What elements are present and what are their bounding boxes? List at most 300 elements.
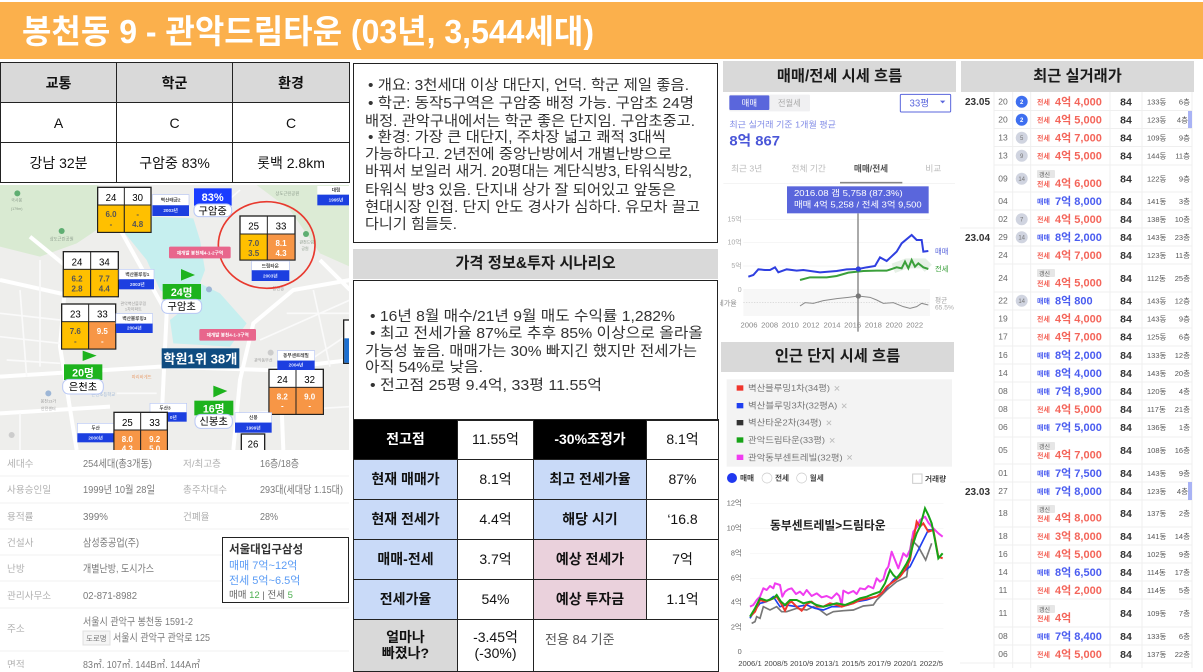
school: 구암중 83%: 83%: [202, 192, 224, 204]
month 23.05: 109동: [1147, 134, 1167, 142]
month 23.03: 전세: [1037, 550, 1050, 559]
month 23.04: 전세: [1037, 451, 1050, 460]
table: location ratings: 학군: [162, 74, 187, 90]
month 23.03: 6층: [1179, 632, 1190, 641]
table: price scenario: 7억: [672, 551, 693, 567]
map base: 상도근린공원: [275, 190, 299, 196]
month 23.03: 매매: [1037, 487, 1050, 496]
month 23.04: 매매: [1037, 423, 1050, 432]
month 23.04: 136동: [1147, 423, 1167, 432]
month 23.03: 84: [1120, 567, 1132, 579]
price box: 24/32: 32: [304, 375, 315, 386]
month 23.03: 141동: [1147, 532, 1167, 541]
complex tags: 벽산태금2: [161, 197, 181, 204]
legend: ✕: [841, 401, 848, 411]
table: price scenario: ‘16.8: [667, 511, 698, 527]
redevelopment labels: 재개발 봉천제4-1-2구역: [177, 249, 223, 256]
month 23.04: 21층: [1175, 405, 1190, 414]
heading: price info: 가격 정보&투자 시나리오: [455, 255, 616, 272]
average price: 8억 867: [729, 132, 780, 148]
edge marker: [344, 320, 351, 363]
table: location ratings: 롯백 2.8km: [257, 154, 325, 170]
line chart: 2022: [906, 321, 923, 330]
month 23.05: 144동: [1147, 152, 1167, 160]
complex tags: 2003년: [263, 272, 278, 278]
month 23.04: 117동: [1147, 405, 1166, 414]
callout: 서울대입구삼성: 전세 5억~6.5억: [229, 574, 300, 587]
month 23.05: 04: [998, 196, 1008, 206]
price box: 25/33 dream town: 8.1: [275, 239, 287, 248]
month 23.03: 전세: [1037, 532, 1050, 541]
month 23.03: 114동: [1147, 586, 1166, 595]
month 23.05: 84: [1120, 174, 1132, 186]
month 23.05: 4억 5,000: [1055, 114, 1102, 126]
map base: 1차아파트: [125, 306, 142, 312]
tab toggle: 전월세: [778, 98, 801, 108]
price box: 25/33 bottom: 25: [122, 418, 133, 429]
month 23.04: 매매: [1037, 369, 1050, 378]
school: 구암중 83%: 구암중: [198, 205, 227, 217]
month 23.04: 112동: [1147, 274, 1166, 283]
month 23.03: 4억 2,000: [1055, 584, 1102, 597]
month 23.05: 09: [998, 174, 1008, 184]
month 23.03: 전세: [1037, 650, 1050, 659]
month 23.04: 84: [1120, 273, 1132, 285]
line chart: 0: [738, 287, 742, 294]
month 23.05: 매매: [1037, 197, 1050, 206]
values: [83, 458, 343, 671]
table: location ratings: C: [286, 114, 296, 130]
heading: recent transactions: 최근 실거래가: [1033, 68, 1122, 85]
table: price scenario: (-30%): [474, 645, 516, 661]
heading: nearby complexes: [721, 342, 954, 372]
month 23.05: 13: [998, 132, 1008, 142]
month 23.04: 매매: [1037, 387, 1050, 396]
month 23.04: 143동: [1147, 314, 1167, 324]
price box: 23/33: 23: [70, 310, 81, 321]
month 23.03: 매매: [1037, 568, 1050, 577]
school: 은천초 20명: [63, 351, 103, 394]
month 23.03: 06: [998, 649, 1008, 659]
month 23.05: 133동: [1147, 98, 1167, 106]
table: price scenario: 4.4억: [479, 511, 512, 527]
month 23.04: 143동: [1147, 233, 1167, 242]
month 23.05: 23.05: [965, 97, 990, 108]
month 23.03: 22층: [1175, 650, 1190, 659]
labels: [7, 459, 227, 671]
line chart: 2010/9: [790, 659, 813, 668]
legend: ✕: [825, 418, 833, 428]
labels: 총주차대수: [183, 484, 227, 496]
table: location ratings: [0, 62, 350, 183]
month 23.05: 전세: [1037, 134, 1050, 142]
table: price scenario: 현재 전세가: [371, 511, 440, 527]
complex tags: 2003년: [130, 281, 145, 287]
table: recent transactions: [960, 92, 1192, 668]
school: 구암초 24명: 24명: [171, 287, 193, 299]
table: location ratings: 교통: [46, 74, 71, 90]
month 23.04: 14: [1018, 236, 1026, 242]
price box: 24/30: -: [110, 220, 113, 229]
values: 도로명: [86, 633, 107, 643]
map base: 은천초등학교: [91, 391, 115, 398]
month 23.04: 전세: [1037, 405, 1050, 414]
month 23.05: 3층: [1179, 197, 1190, 206]
month 23.04: 전세: [1037, 279, 1050, 288]
month 23.04: 05: [998, 445, 1008, 455]
price box: 25/33 dream town: 3.5: [248, 249, 260, 258]
legend: 관악동부센트레빌(32평): [748, 451, 843, 462]
month 23.04: 84: [1120, 232, 1132, 244]
line chart: [711, 213, 954, 332]
heading: recent transactions: [961, 61, 1194, 92]
line chart: 15억: [727, 215, 742, 223]
table: price scenario: 87%: [668, 471, 697, 487]
size dropdown: [900, 94, 951, 112]
chart panel: nearby complexes: [727, 380, 952, 668]
table: price scenario: 빠졌나?: [382, 645, 429, 661]
labels: 주소: [7, 624, 25, 635]
month 23.04: 매매: [1037, 296, 1050, 306]
school: 은천초 20명: 20명: [72, 368, 94, 380]
line chart: 8억: [731, 548, 742, 557]
tab toggle: 매매: [742, 98, 757, 108]
line chart: 10억: [727, 523, 742, 532]
title banner: 봉천동 9 - 관악드림타운 (03년, 3,544세대): [22, 13, 594, 50]
month 23.04: 24: [998, 250, 1008, 260]
line chart: 0: [738, 647, 742, 656]
line chart: 전세: [935, 264, 948, 273]
month 23.04: 6층: [1179, 332, 1190, 342]
chart tooltip: [787, 186, 929, 213]
table: price scenario: 3.7억: [479, 551, 512, 567]
month 23.04: 12층: [1175, 351, 1190, 360]
line chart: 2008/5: [764, 659, 788, 668]
price box: 24/34: 7.7: [99, 275, 110, 284]
text block: overview: 현대시장 인접. 단지 안도 경사가 심하다. 유모차 끌고: [365, 199, 700, 216]
filter options: 거래량: [925, 473, 946, 483]
month 23.04: 08: [998, 404, 1008, 414]
month 23.03: 매매: [1037, 632, 1050, 641]
title banner: [0, 2, 1203, 59]
line chart: 4억: [731, 598, 742, 607]
price box: 25/33 dream town: 25: [248, 222, 259, 233]
table: price scenario: 해당 시기: [562, 511, 618, 527]
month 23.03: 17층: [1175, 568, 1190, 577]
month 23.04: 125동: [1147, 332, 1167, 342]
price box: 24/30: 4.8: [132, 220, 144, 229]
month 23.05: 122동: [1147, 174, 1167, 184]
map base: 관악벽산블루밍: [120, 300, 146, 306]
map base: 상도근린공원: [50, 236, 74, 242]
month 23.03: 11: [999, 585, 1008, 595]
chart tabs: 최근 3년: [731, 163, 762, 173]
month 23.05: 9: [1020, 154, 1024, 160]
price box: 24/34: [63, 252, 118, 297]
month 23.05: 4억 5,000: [1055, 213, 1102, 226]
month 23.04: 06: [998, 422, 1008, 432]
month 23.05: 9층: [1179, 134, 1190, 142]
chart tabs: [723, 162, 955, 183]
month 23.03: [965, 485, 1190, 661]
month 23.03: 84: [1120, 608, 1132, 620]
month 23.04: 22: [998, 296, 1008, 306]
month 23.05: 14: [1018, 177, 1026, 183]
month 23.05: 02: [998, 214, 1008, 224]
month 23.03: 7층: [1179, 609, 1190, 618]
line chart: [727, 498, 943, 668]
month 23.04: 갱신: [1039, 270, 1050, 278]
school: 구암초 24명: [162, 269, 202, 313]
month 23.04: 4억 7,000: [1055, 330, 1102, 344]
line chart: 2016: [844, 321, 861, 330]
month 23.04: 123동: [1147, 251, 1167, 260]
month 23.04: 84: [1120, 332, 1132, 344]
month 23.04: 4억 4,000: [1055, 312, 1102, 326]
month 23.04: 120동: [1147, 387, 1167, 396]
month 23.03: 4억 8,000: [1055, 512, 1102, 524]
map base: (179m): [11, 207, 22, 211]
legend: ✕: [833, 384, 841, 394]
month 23.04: 14: [1018, 299, 1026, 305]
map highlight circle: [218, 202, 315, 288]
table: price scenario: 전세가율: [380, 591, 431, 607]
complex tags: 두산: [91, 425, 101, 432]
month 23.03: 84: [1120, 631, 1132, 643]
complex tags: 벽산블루밍3: [122, 315, 147, 322]
table: location ratings: 구암중 83%: [139, 154, 210, 170]
line chart: 6억: [731, 573, 742, 582]
line chart: 매매: [935, 247, 948, 256]
price box: 25/33 dream town: [240, 216, 295, 260]
values: 16층/18층: [260, 458, 299, 470]
month 23.04: 08: [998, 386, 1008, 396]
price box: 25/33 bottom: 8.0: [122, 435, 133, 444]
month 23.03: 8억 6,500: [1055, 566, 1102, 579]
month 23.03: 84: [1120, 531, 1132, 543]
price box: 24/34: 34: [99, 257, 110, 268]
month 23.03: 4억: [1055, 612, 1071, 624]
complex tags: 1999년: [246, 424, 261, 430]
complex tags: 2000년: [88, 435, 103, 441]
table: price scenario: [353, 419, 719, 672]
month 23.05: 20: [998, 96, 1008, 106]
month 23.03: 84: [1120, 549, 1132, 561]
tab toggle: [729, 95, 810, 111]
text block: scenario: • 16년 8월 매수/21년 9월 매도 수익률 1,282%: [370, 308, 675, 325]
table: price scenario: 전용 84 기준: [545, 632, 615, 646]
table: price scenario: 매매-전세: [377, 551, 434, 567]
text block: overview: 가능하다고. 2년전에 중앙난방에서 개별난방으로: [365, 146, 672, 163]
table: price scenario: 현재 매매가: [371, 471, 440, 487]
complex tags: 두산3: [159, 404, 171, 411]
complex tags: 2004년: [127, 325, 142, 331]
month 23.05: 20: [998, 114, 1008, 124]
line chart: 2022/5: [920, 659, 943, 668]
month 23.04: 9층: [1179, 469, 1190, 478]
complex tags: 동부센트레빌: [283, 352, 309, 359]
month 23.04: 19: [998, 314, 1008, 324]
month 23.04: [965, 231, 1190, 480]
complex tags: [77, 186, 351, 442]
month 23.05: 4층: [1177, 116, 1188, 124]
price box: 24/32: -: [308, 402, 311, 411]
month 23.03: 갱신: [1039, 606, 1050, 614]
month 23.03: 전세: [1037, 586, 1050, 595]
month 23.04: 84: [1120, 386, 1132, 398]
values: 399%: [83, 511, 108, 523]
legend: 벽산블루밍1차(34평): [748, 383, 830, 393]
text block: scenario: • 전고점 25평 9.4억, 33평 11.55억: [370, 377, 602, 394]
line chart: 2006/1: [738, 659, 762, 668]
month 23.03: 84: [1120, 649, 1132, 661]
month 23.03: 7억 8,400: [1055, 630, 1102, 643]
chart tabs: 전체 기간: [792, 163, 826, 173]
text block: overview: • 환경: 가장 큰 대단지, 주차장 넓고 쾌적 3대씩: [368, 129, 666, 146]
month 23.03: 84: [1120, 486, 1132, 498]
month 23.03: 23.03: [965, 487, 990, 498]
labels: 세대수: [7, 459, 34, 470]
month 23.04: 8억 2,000: [1055, 231, 1102, 244]
values: 02-871-8982: [83, 590, 137, 602]
month 23.05: 84: [1120, 214, 1132, 226]
complex tags: 드림타운: [262, 262, 280, 269]
month 23.04: 16: [998, 350, 1008, 360]
price box: 24/30: 30: [132, 193, 143, 204]
school: 신봉초 16명: [194, 386, 233, 428]
price box: 23/33: -: [74, 337, 77, 346]
values: 개별난방, 도시가스: [83, 563, 154, 575]
heading: price info: [353, 249, 718, 279]
month 23.05: 전세: [1037, 116, 1050, 124]
month 23.04: 전세: [1037, 314, 1050, 324]
month 23.04: 84: [1120, 468, 1132, 480]
month 23.04: 4억 7,000: [1055, 448, 1102, 462]
text block: overview: 다니기 힘들듯.: [365, 216, 457, 233]
month 23.03: 전세: [1037, 614, 1050, 623]
month 23.04: 23.04: [965, 233, 990, 244]
map base: 관악동부선: [254, 357, 273, 363]
month 23.04: 16층: [1175, 446, 1190, 455]
school: 구암중 83%: [194, 188, 232, 217]
month 23.04: 전세: [1037, 251, 1050, 260]
legend: 벽산타운2차(34평): [748, 418, 822, 428]
complex tags: 대림: [332, 186, 340, 193]
map base: [0, 185, 350, 453]
month 23.05: 5: [1020, 136, 1024, 142]
month 23.04: 143동: [1147, 296, 1167, 306]
month 23.05: 2: [1020, 118, 1024, 124]
month 23.04: 4억 7,000: [1055, 249, 1102, 262]
map base: 봉천동: [272, 285, 284, 291]
table: price scenario: 예상 투자금: [556, 591, 624, 607]
price box: 24/32: 9.0: [304, 392, 316, 401]
month 23.05: 138동: [1147, 215, 1167, 224]
table: price scenario: 8.1억: [666, 431, 699, 447]
month 23.04: 매매: [1037, 351, 1050, 360]
chart tabs: 비교: [925, 163, 941, 173]
month 23.03: 109동: [1147, 609, 1167, 618]
legend: ✕: [829, 435, 836, 445]
complex details panel: [0, 450, 349, 668]
heading: price trend: [723, 61, 956, 92]
line chart: 2018: [865, 321, 882, 330]
table: price scenario: 11.55억: [472, 431, 519, 447]
month 23.05: 6층: [1179, 98, 1190, 106]
text block: overview: 바꿔서 보일러 새거. 20평대는 계단식방3, 타워식방2,: [365, 163, 692, 180]
table: location ratings: A: [54, 114, 63, 130]
price box: 25/33 bottom: 33: [149, 418, 160, 429]
month 23.04: 01: [998, 468, 1008, 478]
values: 서울시 관악구 관악로 125: [113, 632, 210, 644]
table: price scenario: 예상 전세가: [556, 551, 624, 567]
text block: overview: [353, 63, 718, 243]
callout: 서울대입구삼성: 매매 7억~12억: [229, 559, 297, 572]
price box: 25/33 dream town: 7.0: [248, 239, 260, 248]
month 23.04: 전세: [1037, 332, 1050, 342]
price box: 24/30: 6.0: [105, 210, 117, 219]
line chart: 10억: [727, 239, 742, 247]
month 23.04: 매매: [1037, 233, 1050, 242]
month 23.05: 7억 8,000: [1055, 195, 1102, 208]
text block: scenario: 아직 54%로 낮음.: [365, 359, 483, 376]
month 23.05: 84: [1120, 114, 1132, 126]
table: location ratings: 강남 32분: [29, 154, 88, 170]
line chart: 2012: [802, 321, 820, 330]
month 23.04: 143동: [1147, 469, 1167, 478]
month 23.04: 84: [1120, 445, 1132, 457]
month 23.04: 12층: [1175, 296, 1190, 306]
month 23.04: 84: [1120, 314, 1132, 326]
month 23.05: 141동: [1147, 197, 1167, 206]
heading: nearby complexes: 인근 단지 시세 흐름: [775, 348, 900, 365]
price box: 24/32: 24: [277, 375, 288, 386]
complex tags: 2004년: [289, 362, 303, 368]
text block: overview: 배정. 관악구내에서는 학군 좋은 단지임. 구암초중고.: [365, 113, 695, 130]
chart tooltip: 2016.08 갭 5,758 (87.3%): [794, 188, 903, 198]
month 23.04: 24: [998, 273, 1008, 283]
month 23.04: 14: [998, 368, 1008, 378]
text block: scenario: [353, 280, 718, 421]
month 23.03: 14: [998, 567, 1008, 577]
month 23.04: 8억 800: [1055, 294, 1093, 308]
price box: 24/34: 6.2: [71, 275, 83, 284]
line chart: 65.5%: [935, 304, 954, 311]
month 23.04: 17: [998, 332, 1008, 342]
chart tooltip: 매매 4억 5,258 / 전세 3억 9,500: [794, 200, 922, 210]
month 23.05: 갱신: [1039, 171, 1050, 179]
table: price scenario: 54%: [481, 591, 510, 607]
month 23.04: 7억 8,900: [1055, 385, 1102, 398]
line chart: 2010: [782, 321, 799, 330]
month 23.03: 4억 5,000: [1055, 548, 1102, 561]
price box: 24/34: 4.4: [99, 285, 110, 294]
month 23.03: 123동: [1147, 487, 1167, 496]
month 23.03: 4억 5,000: [1055, 648, 1102, 661]
month 23.05: 전세: [1037, 98, 1050, 106]
price box: 23/33: 7.6: [70, 327, 81, 336]
month 23.03: 전세: [1037, 514, 1050, 523]
line chart: 2015/5: [842, 659, 865, 668]
price box: 24/30: -: [136, 210, 139, 219]
month 23.03: 7억 8,000: [1055, 485, 1102, 498]
price box: 23/33: 33: [97, 310, 108, 321]
month 23.05: 4억 7,000: [1055, 132, 1102, 144]
month 23.05: 13: [998, 150, 1008, 160]
values: 서울시 관악구 봉천동 1591-2: [83, 616, 193, 628]
month 23.03: 2층: [1179, 509, 1190, 518]
month 23.03: 14층: [1175, 532, 1190, 541]
